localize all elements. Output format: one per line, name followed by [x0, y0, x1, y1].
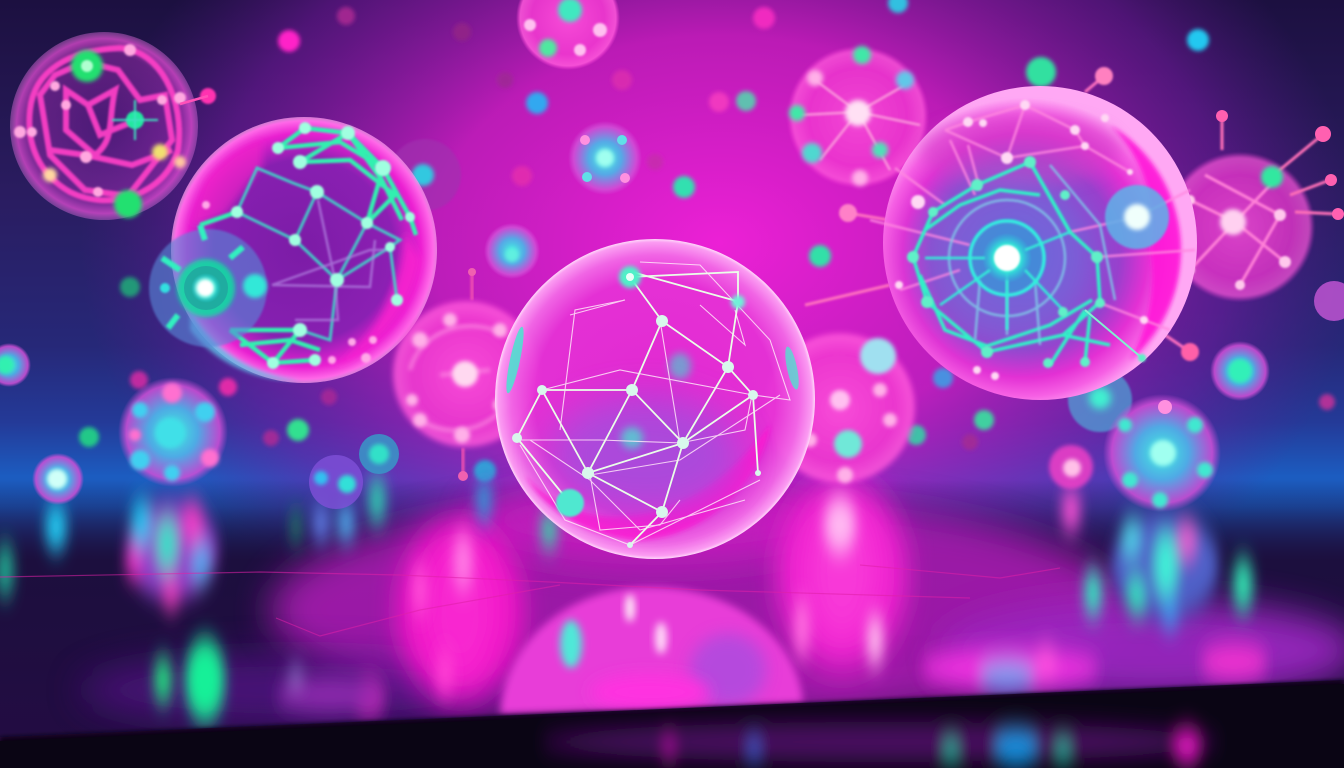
reflection: teal sphere left — [125, 498, 218, 611]
sphere: main center glass — [495, 239, 815, 559]
small spheres around the edges — [0, 281, 1344, 509]
sphere: teal lower left — [118, 377, 228, 487]
sphere: small glowing green core — [149, 225, 267, 347]
sphere: small pink teal — [484, 223, 540, 279]
sphere: far right pink network — [1165, 110, 1344, 302]
sphere: pink left of main — [390, 268, 542, 481]
teal web network — [913, 162, 1110, 365]
sphere: top center partial — [516, 0, 620, 70]
web nodes — [907, 156, 1146, 368]
sphere: pink right of main — [762, 330, 918, 486]
reflection: main sphere — [500, 587, 803, 714]
pink upper network — [870, 105, 1195, 330]
reflection: floor magenta glow — [80, 475, 1344, 726]
table edge foreground — [0, 680, 1344, 768]
reflection: teal sphere right — [1084, 511, 1253, 631]
sphere: pink network top left — [10, 32, 216, 220]
reflection: small spheres — [0, 476, 1081, 598]
reflection: pink sphere left — [396, 520, 524, 700]
green network lines — [237, 168, 400, 340]
reflection: green glow — [154, 638, 386, 722]
floating background dots — [79, 0, 1335, 482]
sphere: teal lower right — [1068, 368, 1221, 512]
green core spokes — [162, 225, 243, 328]
sphere: faint behind large green sphere — [389, 139, 461, 211]
sphere: small teal center — [568, 121, 642, 195]
reflection: pink sheen on floor edge — [920, 644, 1268, 690]
foreground reflections — [540, 722, 1220, 766]
sphere: large right network — [805, 67, 1199, 400]
floor circuit lines — [0, 565, 1060, 636]
main network lines — [517, 272, 758, 545]
sphere: upper center right — [787, 46, 929, 188]
reflection: pink sphere right — [776, 481, 908, 669]
sphere: large green network — [171, 117, 437, 383]
floor reflections — [0, 475, 1344, 726]
